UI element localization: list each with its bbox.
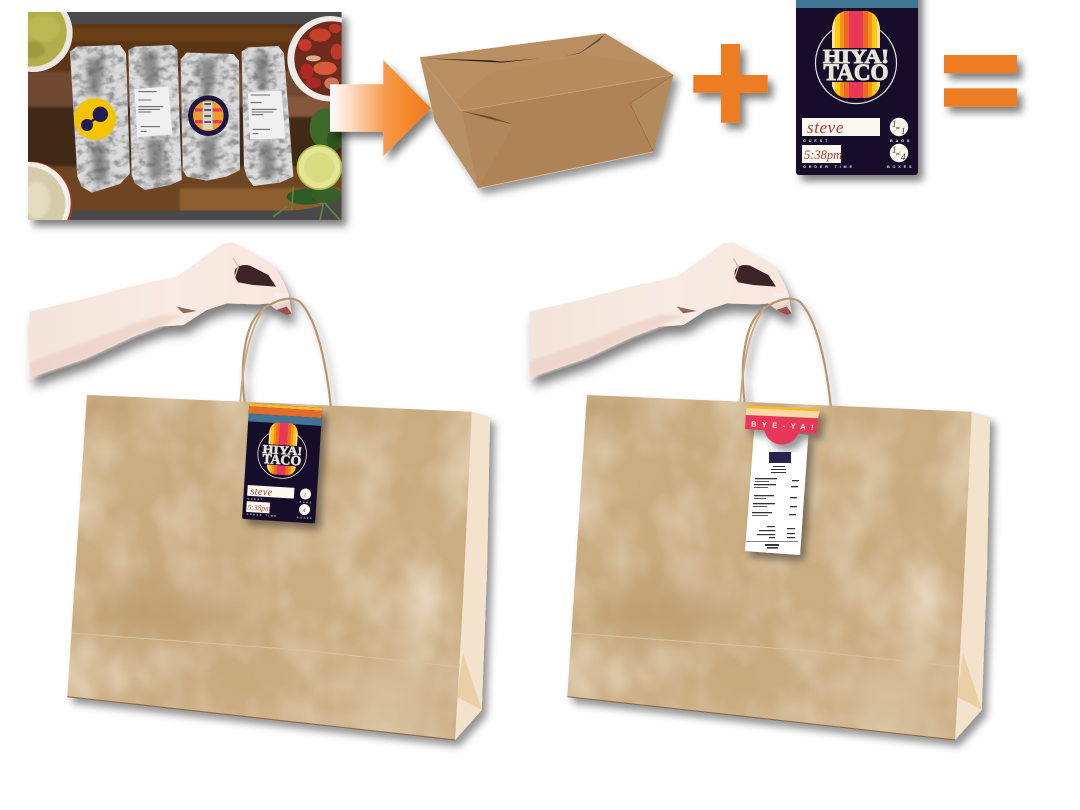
small tag body <box>242 403 322 523</box>
logo: TACO <box>824 60 888 85</box>
bye-ya band: BYE-YA! <box>751 420 819 432</box>
bags counter: 1 <box>901 126 906 136</box>
bags counter: BAGS <box>890 139 912 143</box>
tag: Hiya Taco order card (large) <box>796 0 918 175</box>
wooden board <box>20 20 347 217</box>
small tag stripes <box>248 403 322 426</box>
equals sign <box>944 55 1017 107</box>
right bag hand fingertip over handle <box>777 307 792 315</box>
small time field: ORDER TIME <box>246 514 278 518</box>
burritos foil <box>70 45 293 193</box>
small counters <box>297 488 315 520</box>
sticker navy <box>188 95 229 136</box>
salsa bowl <box>287 16 342 102</box>
small tag logo: TACO <box>262 451 302 468</box>
guest field <box>802 118 880 143</box>
takeout box <box>420 33 673 188</box>
tag on left bag <box>242 403 322 523</box>
sticker yellow <box>74 98 116 140</box>
guest field: steve <box>807 118 844 137</box>
label burrito 4 <box>248 91 285 139</box>
order time field: 5:38pm <box>804 148 842 162</box>
small counters: 1 <box>303 492 307 498</box>
guacamole bowl <box>28 12 73 72</box>
bags counter: OF <box>896 126 900 130</box>
logo <box>816 10 896 104</box>
box left side <box>420 57 478 188</box>
small tag logo <box>256 421 308 480</box>
small counters: BOXES <box>297 517 313 520</box>
small guest field <box>247 485 294 503</box>
order time field <box>802 145 855 169</box>
order time field: ORDER TIME <box>803 165 855 169</box>
box slits <box>425 58 540 63</box>
box front panel <box>462 75 673 188</box>
receipt paper <box>745 429 808 555</box>
arrow: gradient right arrow <box>330 60 431 156</box>
small time field <box>246 501 278 518</box>
boxes counter: 4 <box>901 152 906 162</box>
left paper bag <box>50 299 490 745</box>
guest field: GUEST <box>803 139 830 143</box>
hand holding right bag <box>529 242 792 378</box>
box top flaps <box>420 33 673 111</box>
small time field: 5:38pm <box>247 503 271 513</box>
hand holding left bag <box>29 242 292 378</box>
plus sign <box>693 44 768 123</box>
logo: HIYA! <box>823 46 889 68</box>
boxes counter: OF <box>896 152 900 156</box>
tag body <box>796 0 918 175</box>
photo: foil-wrapped burritos on cutting board <box>27 12 352 232</box>
bye-ya band <box>745 406 820 445</box>
cilantro and lime <box>273 108 343 220</box>
foil shadows <box>87 50 276 185</box>
bags counter <box>890 118 912 143</box>
boxes counter: 1 <box>892 145 896 155</box>
small guest field: GUEST <box>247 498 264 501</box>
right paper bag <box>550 299 990 745</box>
small counters: BAGS <box>299 501 313 504</box>
small counters: 4 <box>302 508 306 514</box>
bags counter: 1 <box>892 119 896 129</box>
left bag hand fingertip over handle <box>277 307 292 315</box>
small tag logo: HIYA! <box>262 442 303 458</box>
background slate <box>28 12 342 220</box>
sour cream bowl <box>28 161 73 220</box>
small guest field: steve <box>250 486 273 499</box>
tag colour stripes <box>796 0 918 8</box>
label burrito 2 <box>134 87 172 137</box>
boxes counter <box>887 144 914 169</box>
boxes counter: BOXES <box>887 165 914 169</box>
receipt tag on right bag <box>745 406 820 555</box>
